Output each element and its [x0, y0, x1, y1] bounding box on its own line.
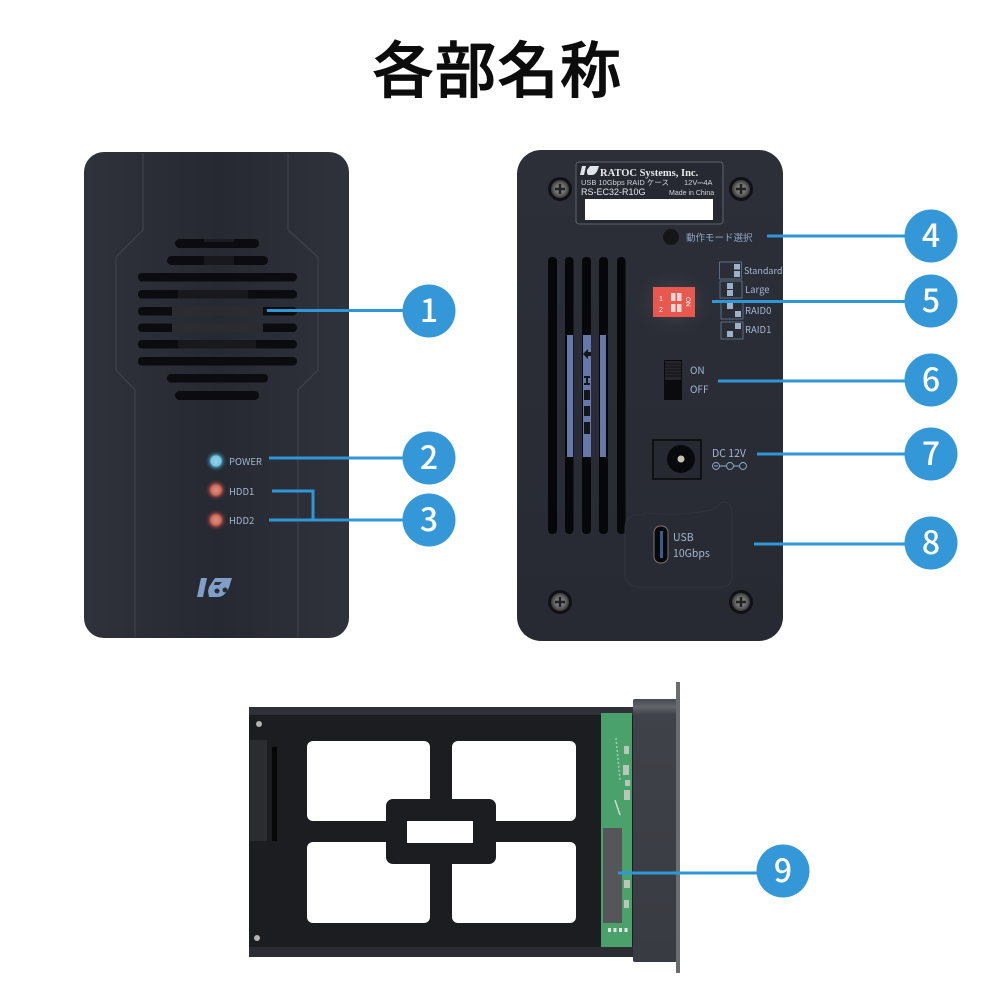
panel: drive tray: [249, 682, 680, 973]
line 8: [754, 542, 910, 546]
DC jack: [653, 440, 747, 479]
line 5: [712, 300, 910, 303]
power slide switch: ON: [690, 362, 705, 377]
DIP switch: 1: [659, 296, 663, 303]
front case moulded lines: [116, 153, 318, 637]
tray bottom rail: [249, 947, 633, 957]
LED HDD2: [205, 509, 254, 531]
line 9: [618, 872, 765, 874]
front logo: [197, 578, 232, 597]
panel: rear of enclosure: [517, 150, 783, 641]
mode select button: [663, 229, 753, 245]
LED HDD1: HDD1: [229, 484, 254, 498]
product label: Made in China: [669, 190, 714, 197]
end plate: [676, 682, 680, 973]
DIP mode legend: Standard: [744, 264, 782, 277]
DC jack: DC 12V: [712, 446, 747, 461]
tray center block: [386, 799, 496, 864]
callout badge 9: 9: [774, 846, 792, 892]
screw: bottom right: [729, 590, 753, 614]
DIP switch glow: [632, 266, 716, 338]
tray screw bottom: [254, 935, 260, 941]
callout badge 6: 6: [922, 355, 940, 401]
DIP mode legend: Large: [745, 282, 770, 296]
DIP mode legend: [720, 262, 782, 339]
line 6: [718, 380, 910, 382]
line 1: [267, 309, 410, 312]
line 2: [269, 456, 410, 460]
line 3: [269, 491, 410, 520]
screw: top right: [729, 177, 753, 201]
callout badge 9: [756, 844, 810, 898]
DIP switch: 2: [659, 307, 663, 314]
USB recess and port: USB: [673, 530, 694, 545]
fan vent: [138, 239, 297, 400]
DIP mode legend: RAID1: [745, 322, 771, 336]
power slide switch: OFF: [690, 381, 709, 396]
SATA connector: [250, 740, 277, 841]
tray screw top: [256, 721, 262, 727]
USB recess and port: 10Gbps: [673, 546, 710, 561]
tray center hole: [407, 821, 473, 843]
mode select button: 動作モード選択: [686, 230, 753, 244]
end housing: [633, 699, 677, 962]
callout badge 3: 3: [420, 495, 438, 541]
title: 各部名称: [372, 21, 623, 110]
tray top rail: [249, 707, 633, 715]
callout badge 2: 2: [420, 433, 438, 479]
LED HDD2: HDD2: [229, 513, 254, 527]
product label: RATOC Systems, Inc.: [600, 168, 699, 179]
tray openings: [307, 741, 576, 923]
callout badge 2: [402, 432, 456, 484]
fan hub seen through vent: [172, 239, 263, 348]
rear vent slots: [548, 257, 626, 534]
LED power: POWER: [229, 454, 262, 468]
callout badge 7: 7: [922, 429, 940, 475]
callout badge 5: 5: [922, 276, 940, 322]
callout badge 1: [402, 284, 456, 338]
line 7: [757, 452, 910, 456]
callout badge 3: [402, 494, 456, 546]
line 4: [767, 234, 910, 238]
circuit board: [601, 713, 632, 947]
callout badge 7: [904, 428, 958, 480]
product label: 12V⎓4A: [684, 178, 713, 187]
callout badge 4: 4: [922, 211, 940, 257]
callout badge 4: [904, 210, 958, 262]
callout badge 5: [904, 274, 958, 328]
product label: [576, 162, 723, 224]
screw: top left: [548, 177, 572, 201]
DIP switch: ON: [684, 297, 691, 307]
rear case body: [517, 150, 783, 641]
callout lines: [267, 236, 910, 873]
power slide switch: [664, 360, 709, 400]
callout badge 8: 8: [922, 518, 940, 564]
USB recess and port: [625, 502, 732, 587]
front case body: [84, 152, 349, 638]
product label: RS-EC32-R10G: [581, 187, 646, 197]
tray frame: [249, 707, 633, 957]
LED power: [205, 450, 262, 472]
callout badge 6: [904, 354, 958, 406]
product label: USB 10Gbps RAID ケース: [581, 178, 669, 187]
callout badge 8: [904, 516, 958, 570]
screw: bottom left: [548, 590, 572, 614]
DIP mode legend: RAID0: [745, 303, 771, 317]
DIP switch: [653, 287, 695, 317]
LED HDD1: [205, 479, 254, 501]
panel: front of enclosure: [84, 152, 349, 638]
callout badge 1: 1: [420, 286, 438, 332]
